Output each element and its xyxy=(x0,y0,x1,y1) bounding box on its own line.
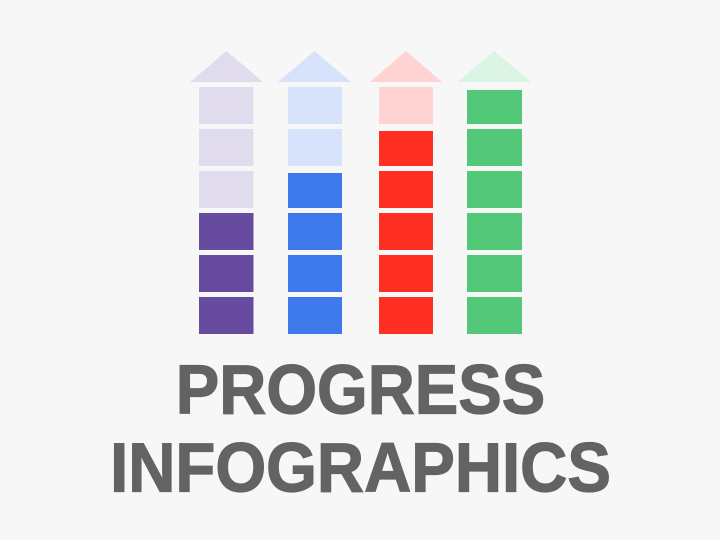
purple filled segments xyxy=(199,213,254,334)
title xyxy=(110,352,611,507)
green filled segments xyxy=(467,90,522,334)
blue progress column xyxy=(278,51,351,334)
title line 1: PROGRESS xyxy=(176,352,545,429)
red progress column xyxy=(370,51,442,334)
title line 2: INFOGRAPHICS xyxy=(110,430,611,507)
purple empty segments xyxy=(199,87,254,208)
icon: green arrow head xyxy=(457,51,531,82)
purple progress column xyxy=(190,51,263,334)
icon: blue arrow head xyxy=(278,51,351,82)
icon: red arrow head xyxy=(370,51,442,82)
blue filled segments xyxy=(288,173,342,334)
green progress column xyxy=(457,51,531,334)
blue empty segments xyxy=(288,87,342,166)
icon: purple arrow head xyxy=(190,51,263,82)
red empty segment xyxy=(379,87,433,124)
red filled segments xyxy=(379,131,433,334)
